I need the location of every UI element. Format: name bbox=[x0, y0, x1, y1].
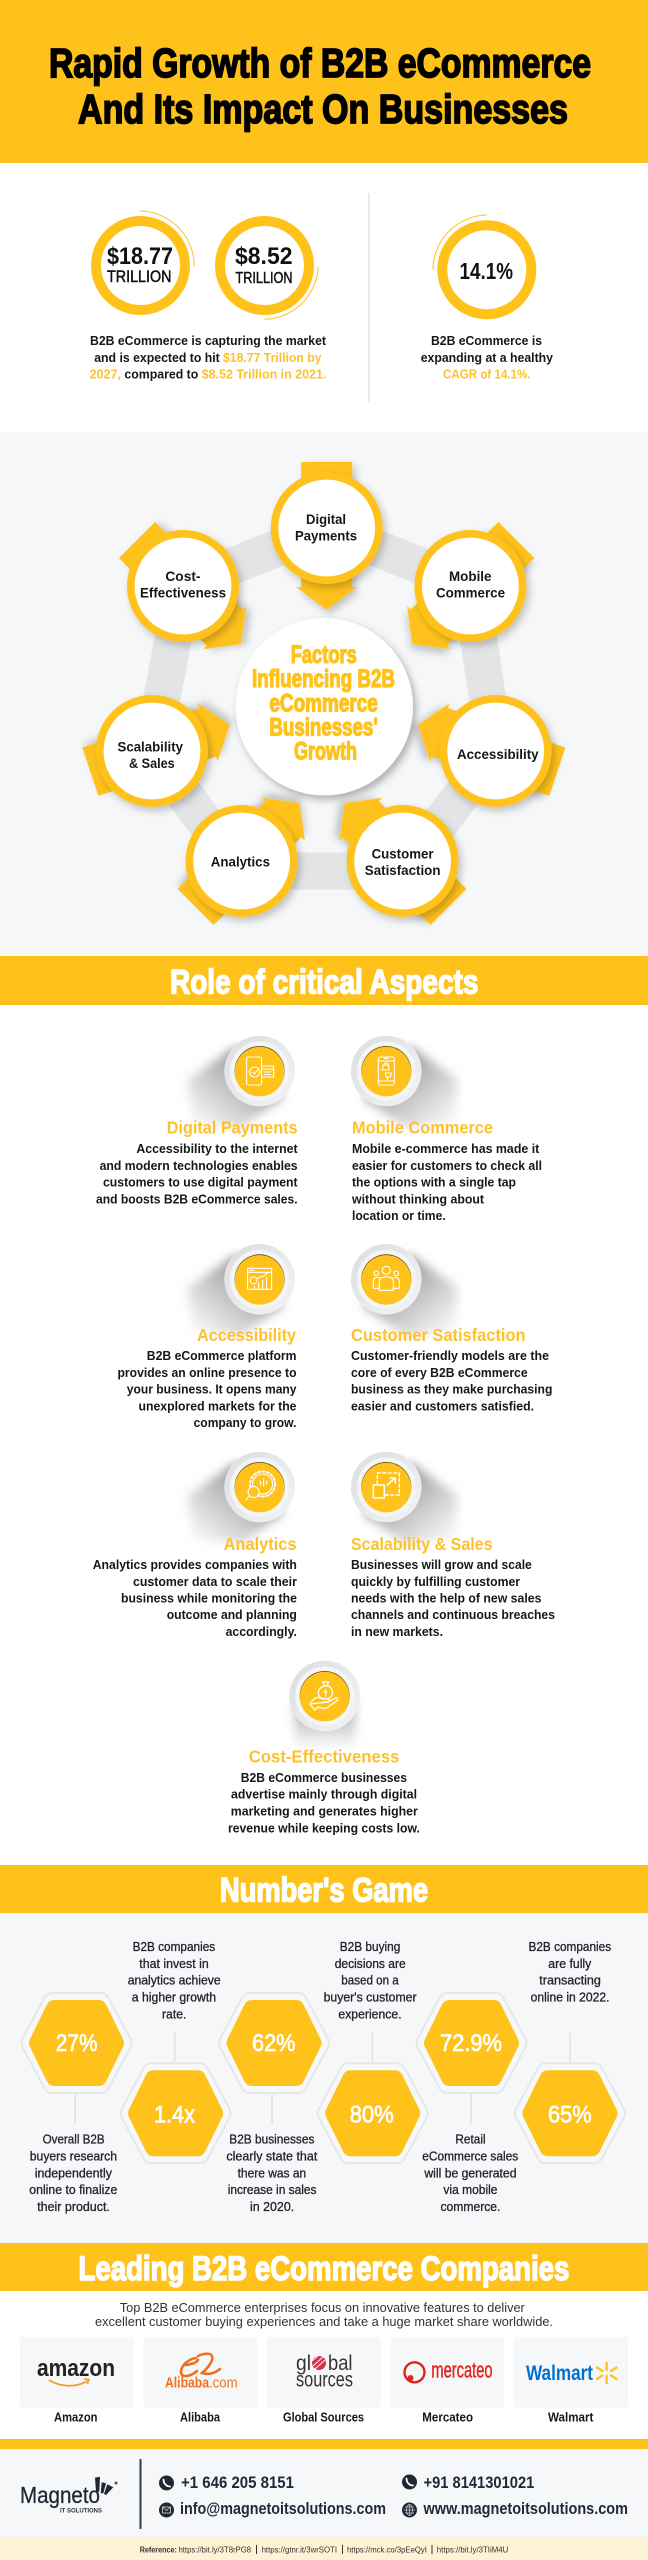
stat: 72.9 percent: 72.9% bbox=[440, 2030, 502, 2057]
market size description: $18.77 Trillion by bbox=[223, 351, 322, 365]
aspect: customer satisfaction: Customer Satisfaction bbox=[351, 1325, 526, 1345]
stat: 80 percent: buyer's customer bbox=[324, 1991, 417, 2005]
stat: 72.9 percent: via mobile bbox=[443, 2183, 498, 2197]
market size description: compared to bbox=[124, 368, 199, 382]
factor: accessibility bbox=[408, 695, 567, 807]
stat: 1.4x: analytics achieve bbox=[128, 1974, 221, 1988]
aspect: customer satisfaction: core of every B2B eCommerce bbox=[351, 1366, 528, 1380]
icon: hand with money bag bbox=[289, 1661, 360, 1750]
aspect: cost-effectiveness: revenue while keeping costs low. bbox=[228, 1821, 420, 1835]
stat: 1.4x: a higher growth bbox=[132, 1991, 216, 2005]
aspect: customer satisfaction: easier and customers satisfied. bbox=[351, 1400, 534, 1414]
factor: mobile commerce bbox=[391, 518, 538, 666]
stat: 65 percent: 65% bbox=[548, 2101, 592, 2128]
stat: 62 percent: in 2020. bbox=[250, 2200, 294, 2214]
heading banner: role of critical aspects: Role of critical Aspects bbox=[170, 963, 478, 1001]
factor: mobile commerce: Commerce bbox=[436, 585, 505, 601]
icon: group of people bbox=[351, 1244, 458, 1336]
footer bbox=[0, 2449, 648, 2537]
company: Walmart: Walmart bbox=[548, 2410, 594, 2425]
factor: cost-effectiveness: Effectiveness bbox=[140, 585, 226, 601]
stat: 27 percent: 27% bbox=[56, 2030, 98, 2057]
aspect: scalability and sales: Businesses will grow and scale bbox=[351, 1558, 532, 1572]
stat circle: 8.52 trillion: $8.52 bbox=[235, 243, 292, 270]
aspect: cost-effectiveness: B2B eCommerce businesses bbox=[241, 1771, 407, 1785]
stat circle: 18.77 trillion: TRILLION bbox=[107, 268, 172, 286]
stat: 62 percent: B2B businesses bbox=[229, 2133, 314, 2147]
aspect: analytics bbox=[93, 1452, 297, 1639]
icon: phone payment bbox=[188, 1036, 295, 1128]
panel: factors wheel bbox=[0, 432, 648, 956]
aspect: cost-effectiveness: advertise mainly through digital bbox=[231, 1788, 417, 1802]
stat: 27 percent: online to finalize bbox=[29, 2183, 117, 2197]
CAGR description: B2B eCommerce is bbox=[431, 334, 542, 348]
company: Alibaba bbox=[143, 2337, 257, 2425]
factor: scalability and sales: Scalability bbox=[118, 738, 183, 754]
CAGR description: CAGR of 14.1%. bbox=[443, 368, 531, 382]
references strip: https://bit.ly/3TIiM4U bbox=[437, 2546, 509, 2555]
company: Amazon bbox=[20, 2337, 134, 2425]
market size description bbox=[90, 334, 327, 382]
stat: 80 percent: 80% bbox=[350, 2101, 394, 2128]
factor: customer satisfaction: Satisfaction bbox=[365, 862, 440, 878]
aspect: analytics: outcome and planning bbox=[167, 1608, 297, 1622]
heading banner: number's game bbox=[0, 1865, 648, 1913]
aspect: mobile commerce: without thinking about bbox=[351, 1192, 485, 1206]
stat: 80 percent bbox=[324, 1940, 419, 2154]
company: Global Sources: gl bbox=[296, 2352, 311, 2375]
aspect: digital payments: Accessibility to the internet bbox=[136, 1142, 298, 1156]
center circle bbox=[236, 618, 413, 795]
aspect: accessibility: company to grow. bbox=[194, 1416, 296, 1430]
company: Global Sources: bal bbox=[328, 2352, 352, 2375]
stat circle: 14.1 percent: 14.1% bbox=[460, 258, 513, 284]
stat: 80 percent: B2B buying bbox=[340, 1940, 400, 1954]
aspect: scalability and sales: in new markets. bbox=[351, 1625, 443, 1639]
market size description: B2B eCommerce is capturing the market bbox=[90, 334, 327, 348]
center circle: Businesses' bbox=[269, 714, 378, 742]
stat circle: 8.52 trillion: TRILLION bbox=[236, 270, 292, 287]
stat: 72.9 percent: eCommerce sales bbox=[422, 2150, 518, 2164]
stat circle: 14.1 percent bbox=[433, 215, 531, 314]
aspect: analytics: Analytics provides companies with bbox=[93, 1558, 297, 1572]
heading banner: leading companies bbox=[0, 2243, 648, 2291]
market size description: and is expected to hit bbox=[94, 351, 221, 365]
stat circle: 8.52 trillion bbox=[220, 221, 318, 319]
company: Walmart bbox=[514, 2337, 628, 2425]
aspect: analytics: Analytics bbox=[224, 1534, 297, 1554]
aspect: cost-effectiveness: Cost-Effectiveness bbox=[249, 1747, 400, 1767]
stat: 65 percent bbox=[524, 1940, 616, 2154]
stat: 1.4x: B2B companies bbox=[133, 1940, 215, 1954]
stat: 62 percent bbox=[226, 2002, 320, 2214]
aspect: analytics: customer data to scale their bbox=[133, 1575, 297, 1589]
aspect: digital payments bbox=[96, 1036, 298, 1206]
market size description: 2027, bbox=[90, 368, 121, 382]
references strip: https://mck.co/3pEeQyI bbox=[347, 2546, 427, 2555]
factor: customer satisfaction: Customer bbox=[372, 845, 434, 861]
aspect: mobile commerce: location or time. bbox=[352, 1209, 446, 1223]
title bbox=[49, 40, 591, 132]
company: Mercateo bbox=[391, 2337, 504, 2425]
references strip: Reference: bbox=[140, 2546, 177, 2555]
aspect: cost-effectiveness: marketing and generates higher bbox=[231, 1805, 418, 1819]
company: Global Sources bbox=[267, 2337, 381, 2425]
center circle: Influencing B2B bbox=[252, 665, 395, 693]
aspect: scalability and sales bbox=[351, 1452, 555, 1639]
panel: market size stats bbox=[90, 211, 327, 382]
contact: email: info@magnetoitsolutions.com bbox=[180, 2500, 386, 2518]
company: Mercateo: mercateo bbox=[431, 2358, 493, 2383]
company: Mercateo: Mercateo bbox=[422, 2410, 473, 2425]
stat: 27 percent bbox=[29, 2002, 122, 2214]
aspect: scalability and sales: channels and continuous breaches bbox=[351, 1608, 555, 1622]
stat: 62 percent: clearly state that bbox=[226, 2150, 318, 2164]
company: Amazon: amazon bbox=[37, 2355, 115, 2382]
stat: 80 percent: experience. bbox=[338, 2007, 402, 2021]
icon: browser chart bbox=[188, 1244, 295, 1336]
CAGR description: expanding at a healthy bbox=[421, 351, 553, 365]
aspect: customer satisfaction: Customer-friendly models are the bbox=[351, 1349, 549, 1363]
companies intro text bbox=[95, 2300, 553, 2329]
aspect: mobile commerce bbox=[351, 1036, 542, 1223]
references strip: https://gtnr.it/3wrSOTI bbox=[262, 2546, 337, 2555]
stat: 62 percent: there was an bbox=[238, 2166, 306, 2180]
aspect: customer satisfaction bbox=[351, 1244, 552, 1414]
aspect: mobile commerce: the options with a single tap bbox=[352, 1176, 516, 1190]
factor: digital payments: Digital bbox=[306, 511, 346, 527]
center circle: Factors bbox=[291, 641, 357, 669]
aspect: accessibility: your business. It opens many bbox=[127, 1383, 297, 1397]
stat: 65 percent: are fully bbox=[548, 1957, 592, 1971]
stat: 27 percent: buyers research bbox=[30, 2150, 117, 2164]
company: Global Sources: Global Sources bbox=[283, 2410, 364, 2425]
stat: 62 percent: increase in sales bbox=[228, 2183, 316, 2197]
stat: 65 percent: B2B companies bbox=[528, 1940, 611, 1954]
aspect: accessibility: unexplored markets for the bbox=[138, 1400, 297, 1414]
aspect: cost-effectiveness bbox=[228, 1661, 420, 1835]
stat: 72.9 percent: commerce. bbox=[440, 2200, 500, 2214]
factor: mobile commerce: Mobile bbox=[449, 568, 492, 584]
stat: 1.4x: that invest in bbox=[139, 1957, 209, 1971]
CAGR description bbox=[421, 334, 553, 382]
stat: 72.9 percent bbox=[422, 2002, 518, 2214]
heading banner: role of critical aspects bbox=[0, 956, 648, 1005]
factor: cost-effectiveness bbox=[115, 518, 263, 666]
aspect: customer satisfaction: business as they make purchasing bbox=[351, 1383, 552, 1397]
center circle: Growth bbox=[294, 737, 357, 765]
aspect: scalability and sales: needs with the help of new sales bbox=[351, 1592, 541, 1606]
company: Alibaba: .com bbox=[209, 2375, 238, 2392]
stat: 1.4x bbox=[128, 1940, 222, 2154]
company: Alibaba: Alibaba bbox=[165, 2375, 210, 2392]
stat circle: 18.77 trillion: $18.77 bbox=[107, 243, 173, 270]
company: Walmart: Walmart bbox=[526, 2362, 593, 2385]
stat: 1.4x: 1.4x bbox=[154, 2101, 195, 2128]
factor: accessibility: Accessibility bbox=[457, 746, 539, 762]
factor: digital payments: Payments bbox=[295, 528, 357, 544]
stat circle: 18.77 trillion bbox=[96, 211, 194, 310]
company: Global Sources: sources bbox=[296, 2369, 353, 2392]
stat: 27 percent: independently bbox=[35, 2166, 113, 2180]
contact: India phone: +91 8141301021 bbox=[424, 2474, 534, 2492]
factor: scalability and sales bbox=[81, 695, 239, 807]
logo: Magneto: IT SOLUTIONS bbox=[60, 2508, 103, 2514]
center circle: eCommerce bbox=[269, 690, 378, 718]
aspect: digital payments: customers to use digital payment bbox=[103, 1176, 298, 1190]
stat: 72.9 percent: Retail bbox=[455, 2133, 486, 2147]
aspect: accessibility: provides an online presence to bbox=[118, 1366, 297, 1380]
aspect: accessibility: Accessibility bbox=[197, 1325, 296, 1345]
aspect: scalability and sales: Scalability & Sales bbox=[351, 1534, 493, 1554]
panel: CAGR stat bbox=[421, 215, 553, 382]
factor: scalability and sales: & Sales bbox=[129, 755, 175, 771]
stat: 72.9 percent: will be generated bbox=[423, 2166, 517, 2180]
market size description: $8.52 Trillion in 2021. bbox=[202, 368, 326, 382]
stat: 80 percent: decisions are bbox=[335, 1957, 406, 1971]
aspect: mobile commerce: Mobile e-commerce has made it bbox=[352, 1142, 540, 1156]
aspect: scalability and sales: quickly by fulfilling customer bbox=[351, 1575, 520, 1589]
icon: gear and magnifier bbox=[188, 1452, 295, 1544]
icon: scaling square bbox=[351, 1452, 458, 1544]
aspect: accessibility: B2B eCommerce platform bbox=[147, 1349, 296, 1363]
stat: 1.4x: rate. bbox=[162, 2007, 186, 2021]
company: Amazon: Amazon bbox=[54, 2410, 98, 2425]
references strip: https://bit.ly/3T8rPG8 bbox=[178, 2546, 252, 2555]
stat: 62 percent: 62% bbox=[252, 2030, 296, 2057]
panel: number's game bbox=[0, 1913, 648, 2243]
factor: customer satisfaction bbox=[323, 781, 470, 929]
aspect: analytics: accordingly. bbox=[226, 1625, 297, 1639]
header banner bbox=[0, 0, 648, 163]
aspect: accessibility bbox=[118, 1244, 297, 1430]
factor: cost-effectiveness: Cost- bbox=[165, 568, 201, 584]
aspect: digital payments: Digital Payments bbox=[167, 1117, 298, 1137]
stat: 80 percent: based on a bbox=[341, 1974, 399, 1988]
factor: digital payments bbox=[271, 462, 383, 610]
companies intro text: Top B2B eCommerce enterprises focus on innovative features to deliver bbox=[120, 2300, 525, 2315]
companies intro text: excellent customer buying experiences and take a huge market share worldwide. bbox=[95, 2314, 553, 2329]
logo: Magneto: Magneto bbox=[20, 2482, 100, 2508]
references strip bbox=[0, 2537, 648, 2560]
factor: analytics bbox=[174, 781, 321, 929]
stat: 27 percent: their product. bbox=[37, 2200, 110, 2214]
company: Alibaba: Alibaba bbox=[180, 2410, 221, 2425]
stat: 27 percent: Overall B2B bbox=[43, 2133, 105, 2147]
aspect: digital payments: and boosts B2B eCommerce sales. bbox=[96, 1192, 298, 1206]
icon: mobile shopping bbox=[351, 1036, 458, 1128]
factor: analytics: Analytics bbox=[211, 853, 270, 869]
stat: 65 percent: transacting bbox=[539, 1974, 601, 1988]
stat: 65 percent: online in 2022. bbox=[531, 1991, 610, 2005]
logo: Magneto bbox=[20, 2477, 118, 2514]
aspect: analytics: business while monitoring the bbox=[121, 1592, 297, 1606]
aspect: mobile commerce: easier for customers to check all bbox=[352, 1159, 542, 1173]
aspect: mobile commerce: Mobile Commerce bbox=[352, 1117, 493, 1137]
heading banner: number's game: Number's Game bbox=[220, 1872, 428, 1910]
aspect: digital payments: and modern technologies enables bbox=[100, 1159, 298, 1173]
contact: US phone: +1 646 205 8151 bbox=[181, 2474, 294, 2492]
